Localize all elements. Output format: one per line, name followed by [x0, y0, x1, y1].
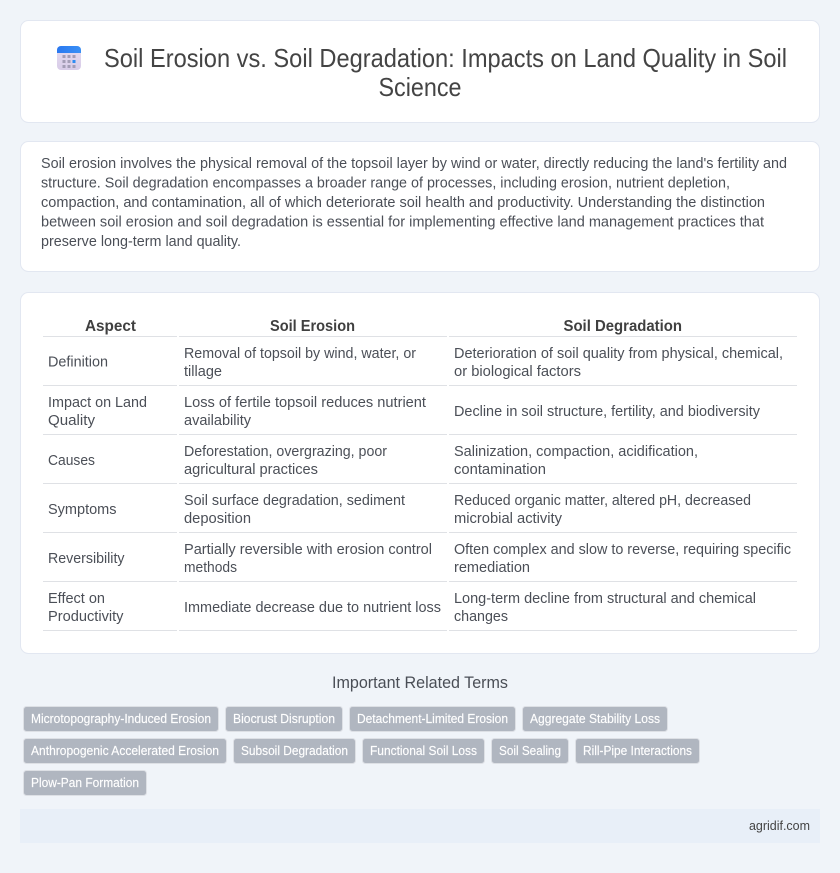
- title: [104, 45, 787, 102]
- row: effect on productivity: Productivity: [48, 609, 124, 625]
- row: causes: [48, 444, 698, 478]
- row: definition: tillage: [184, 364, 222, 380]
- tag list: Biocrust Disruption: [233, 712, 335, 726]
- row: reversibility: [48, 542, 791, 576]
- tag list: Microtopography-Induced Erosion: [31, 712, 211, 726]
- intro paragraph: between soil erosion and soil degradation is essential for implementing effective land management practices that: [41, 214, 764, 230]
- row: effect on productivity: Long-term decline from structural and chemical: [454, 591, 756, 607]
- tag list: Subsoil Degradation: [241, 744, 348, 758]
- row: reversibility: Often complex and slow to reverse, requiring specific: [454, 542, 791, 558]
- row: definition: Removal of topsoil by wind, water, or: [184, 346, 416, 362]
- table header row: Soil Erosion: [270, 318, 355, 335]
- tag list: Soil Sealing: [499, 744, 561, 758]
- row: definition: [48, 346, 783, 380]
- intro paragraph: [41, 156, 787, 250]
- footer: [20, 809, 820, 843]
- table header row: Aspect: [85, 318, 136, 335]
- row: symptoms: microbial activity: [454, 511, 563, 527]
- heading: important related terms: Important Related Terms: [332, 674, 508, 692]
- row: reversibility: Reversibility: [48, 551, 125, 567]
- row: impact on land quality: Loss of fertile topsoil reduces nutrient: [184, 395, 426, 411]
- table header row: [85, 318, 682, 335]
- row: effect on productivity: changes: [454, 609, 508, 625]
- intro paragraph: preserve long-term land quality.: [41, 234, 241, 250]
- tag list: Anthropogenic Accelerated Erosion: [31, 744, 219, 758]
- row: definition: Definition: [48, 354, 108, 370]
- row: causes: Salinization, compaction, acidification,: [454, 444, 698, 460]
- row: symptoms: deposition: [184, 511, 251, 527]
- row: definition: or biological factors: [454, 364, 581, 380]
- panel: title header: [20, 20, 820, 122]
- row: symptoms: [48, 493, 751, 527]
- row: reversibility: methods: [184, 560, 237, 576]
- tag list: Rill-Pipe Interactions: [583, 744, 692, 758]
- footer: agridif.com: [749, 818, 810, 833]
- tag list: Aggregate Stability Loss: [530, 712, 660, 726]
- row: impact on land quality: Impact on Land: [48, 395, 147, 411]
- row: definition: Deterioration of soil quality from physical, chemical,: [454, 346, 783, 362]
- row: symptoms: Soil surface degradation, sediment: [184, 493, 405, 509]
- row: effect on productivity: Effect on: [48, 591, 105, 607]
- row: impact on land quality: availability: [184, 413, 252, 429]
- intro paragraph: structure. Soil degradation encompasses a broader range of processes, including erosion, nutrient depletion,: [41, 176, 730, 192]
- tag list: Plow-Pan Formation: [31, 776, 139, 790]
- row: reversibility: remediation: [454, 560, 530, 576]
- tag list: [24, 706, 700, 796]
- icon: calendar: [57, 46, 81, 70]
- row: reversibility: Partially reversible with erosion control: [184, 542, 432, 558]
- tag list: Functional Soil Loss: [370, 744, 477, 758]
- row: causes: Deforestation, overgrazing, poor: [184, 444, 387, 460]
- title: Soil Erosion vs. Soil Degradation: Impacts on Land Quality in Soil: [104, 45, 787, 73]
- row: symptoms: Reduced organic matter, altered pH, decreased: [454, 493, 751, 509]
- row: impact on land quality: Decline in soil structure, fertility, and biodiversity: [454, 404, 761, 420]
- title: Science: [378, 74, 462, 102]
- intro paragraph: compaction, and contamination, all of which deteriorate soil health and productivity. Understanding the distinction: [41, 195, 765, 211]
- intro paragraph: Soil erosion involves the physical removal of the topsoil layer by wind or water, directly reducing the land's fertility and: [41, 156, 787, 172]
- table header row: Soil Degradation: [564, 318, 682, 335]
- row: impact on land quality: Quality: [48, 413, 96, 429]
- row: impact on land quality: [48, 395, 761, 429]
- tag list: Detachment-Limited Erosion: [357, 712, 508, 726]
- row: symptoms: Symptoms: [48, 502, 116, 518]
- panel: comparison table: [20, 292, 820, 654]
- row: causes: agricultural practices: [184, 462, 318, 478]
- panel: introduction: [20, 142, 820, 272]
- row: causes: contamination: [454, 462, 546, 478]
- row: effect on productivity: Immediate decrease due to nutrient loss: [184, 600, 441, 616]
- row: causes: Causes: [48, 453, 95, 469]
- row: effect on productivity: [48, 591, 756, 625]
